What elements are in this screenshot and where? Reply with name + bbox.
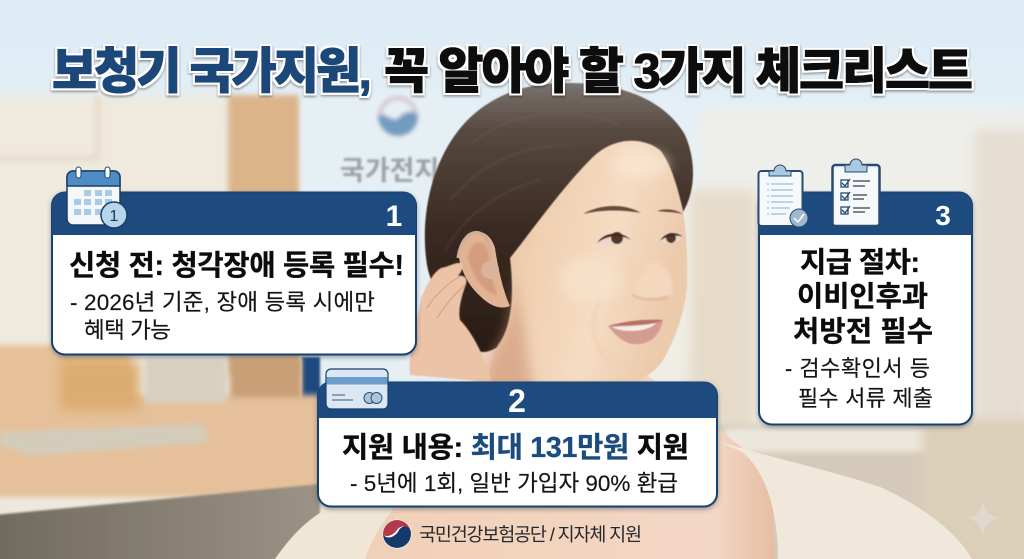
panel 2: support (318, 369, 717, 506)
wood pillar (228, 95, 300, 375)
left wall (0, 95, 230, 345)
title: black part: 꼭 알아야 할 3가지 체크리스트 (384, 45, 973, 99)
window frame (0, 95, 98, 158)
heading: 처방전 필수 (793, 316, 933, 348)
facial shading (480, 151, 668, 395)
nose (630, 262, 673, 299)
heading: 지원 내용: 최대 131만원 지원 (342, 432, 689, 464)
panel 1: registration (52, 167, 416, 354)
heading (793, 247, 933, 348)
desk (0, 395, 325, 497)
poster (301, 95, 451, 415)
card body (318, 382, 717, 506)
sweater right (718, 441, 972, 559)
body text: 혜택 가능 (84, 318, 171, 343)
number 2: 2 (508, 383, 526, 419)
card body (759, 192, 972, 424)
card body (52, 192, 416, 354)
body text (785, 356, 933, 411)
footer text: 국민건강보험공단 / 지자체 지원 (419, 524, 642, 545)
hearing aid (458, 232, 499, 279)
mouth (608, 320, 663, 344)
body text: - 5년에 1회, 일반 가입자 90% 환급 (350, 471, 678, 496)
card header (52, 192, 416, 235)
hair highlights (445, 113, 620, 250)
number 3: 3 (935, 200, 951, 231)
keyboard (0, 424, 208, 456)
check badge (790, 209, 808, 227)
heading: 이비인후과 (797, 281, 928, 313)
badge 1: 1 (110, 208, 119, 225)
body text: - 검수확인서 등 (785, 356, 930, 381)
face (480, 141, 687, 395)
icon: sparkle (966, 501, 1001, 536)
hair silhouette (425, 83, 693, 352)
title (52, 45, 973, 99)
heading: 지급 절차: (800, 247, 920, 279)
hand (410, 263, 492, 382)
blurred poster text: 국가전지원 (340, 156, 464, 186)
sweater left (275, 495, 420, 559)
ear (459, 232, 510, 308)
right wall (700, 110, 1024, 440)
chest and neck (365, 340, 775, 559)
footer: sponsor (382, 520, 642, 548)
icon: checklist clipboard (832, 159, 880, 226)
eyes (597, 232, 683, 245)
title: blue part: 보청기 국가지원, (52, 45, 372, 99)
icon: clipboard document (758, 165, 808, 227)
blurred emblem on poster (378, 96, 418, 136)
eyebrows (583, 206, 683, 214)
photo: woman with hearing aid (275, 83, 972, 559)
body text: 필수 서류 제출 (798, 386, 933, 411)
panel 3: payment procedure (758, 159, 972, 424)
icon: credit card (326, 369, 388, 409)
body text: - 2026년 기준, 장애 등록 시에만 (70, 290, 375, 315)
body text (70, 290, 375, 343)
number 1: 1 (386, 200, 402, 233)
heading: 신청 전: 청각장애 등록 필수! (69, 250, 404, 282)
icon: calendar (67, 167, 127, 228)
icon: taegeuk emblem (382, 520, 412, 548)
card header (318, 382, 717, 418)
card header (759, 192, 972, 235)
floor (0, 484, 320, 559)
